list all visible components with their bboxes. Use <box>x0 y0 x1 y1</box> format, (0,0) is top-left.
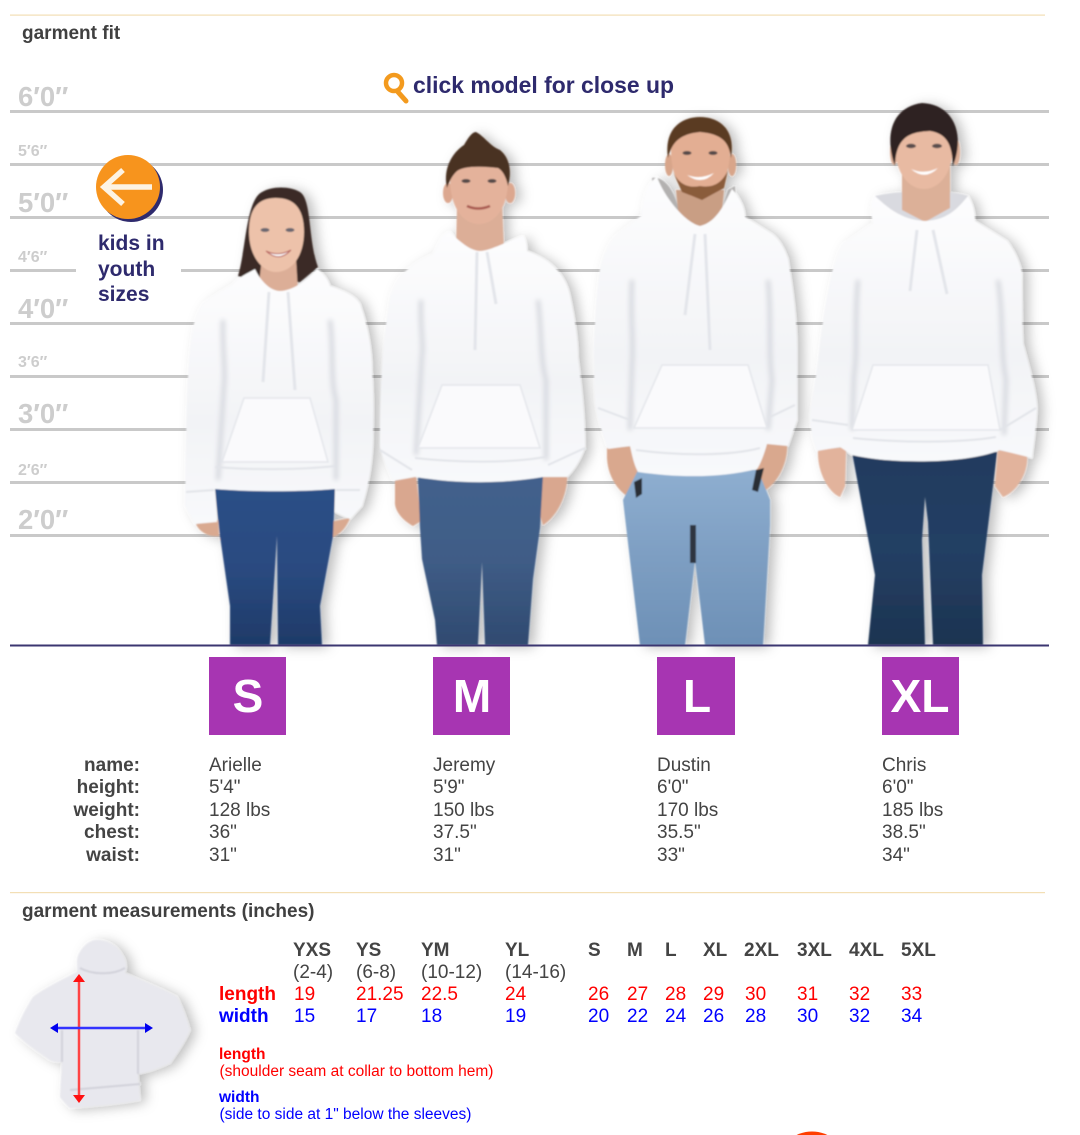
measurement table <box>218 940 936 1027</box>
chart baseline <box>10 644 1049 646</box>
stats: Dustin: 33" <box>657 845 685 866</box>
height scale labels: 3′0″ <box>18 398 68 429</box>
stats: Arielle: 5'4" <box>209 777 241 798</box>
section divider <box>10 892 1045 893</box>
table header: sizes: L <box>665 940 677 961</box>
stats: Chris: 185 lbs <box>882 800 943 821</box>
table header: sizes: 2XL <box>744 940 779 961</box>
model: Chris, size XL <box>810 103 1037 645</box>
heading: garment measurements: garment measurements (inches) <box>22 901 314 922</box>
table row: length: 24 <box>505 984 527 1005</box>
height scale labels: 4′0″ <box>18 293 68 324</box>
link: kids in youth sizes <box>98 232 165 306</box>
size badge: S <box>209 657 286 735</box>
table row: width: 28 <box>745 1006 766 1027</box>
stats: Jeremy: Jeremy <box>433 755 496 776</box>
table row: length: 19 <box>294 984 315 1005</box>
stats: Dustin: Dustin <box>657 755 711 776</box>
table row: length: 28 <box>665 984 686 1005</box>
table header: sizes: (10-12) <box>421 962 482 983</box>
height scale labels: 3′6″ <box>18 354 48 371</box>
stats: Arielle: 31" <box>209 845 237 866</box>
table header: sizes: 3XL <box>797 940 832 961</box>
size badge: L: L <box>683 670 711 722</box>
stats: Dustin: 35.5" <box>657 822 701 843</box>
model: Arielle, size S <box>185 188 373 645</box>
stats: Chris: 38.5" <box>882 822 926 843</box>
stats: Dustin: 6'0" <box>657 777 689 798</box>
icon: magnifying glass <box>386 75 406 101</box>
table row: length: 32 <box>849 984 870 1005</box>
table header: sizes: YM <box>421 940 450 961</box>
note: width definition: (side to side at 1" below the sleeves) <box>220 1106 471 1123</box>
size badge: L <box>657 657 735 735</box>
diagram: hoodie with measurement arrows <box>15 940 190 1108</box>
stats: Jeremy: 150 lbs <box>433 800 494 821</box>
model stat row labels <box>72 755 140 866</box>
model: Jeremy, size M <box>380 132 585 645</box>
height scale labels: 2′6″ <box>18 462 48 479</box>
model: Dustin, size L <box>594 117 797 645</box>
icon: orange back arrow button <box>96 155 163 222</box>
table row: width: width <box>218 1006 269 1027</box>
top divider <box>10 14 1045 16</box>
table header: sizes: 5XL <box>901 940 936 961</box>
table header: sizes: 4XL <box>849 940 884 961</box>
table row: length: 29 <box>703 984 724 1005</box>
height scale labels: 6′0″ <box>18 81 68 112</box>
size badge: M: M <box>453 670 491 722</box>
table row: width: 24 <box>665 1006 687 1027</box>
note: width definition <box>218 1089 471 1123</box>
heading: garment fit: garment fit <box>22 23 121 44</box>
stats: Dustin <box>657 755 718 866</box>
stats: Chris: 6'0" <box>882 777 914 798</box>
model stat row labels: weight: <box>72 800 140 821</box>
stats: Chris: 34" <box>882 845 910 866</box>
model stat row labels: name: <box>84 755 140 776</box>
table row: length: 21.25 <box>356 984 404 1005</box>
stats: Jeremy: 37.5" <box>433 822 477 843</box>
table row: width: 18 <box>421 1006 442 1027</box>
table row: width: 26 <box>703 1006 724 1027</box>
note: length definition: length <box>219 1046 266 1063</box>
height scale labels: 5′6″ <box>18 143 48 160</box>
table row: length: 30 <box>745 984 766 1005</box>
stats: Dustin: 170 lbs <box>657 800 718 821</box>
table header: sizes: YL <box>505 940 530 961</box>
height chart grid <box>10 110 1049 537</box>
height scale labels: 4′6″ <box>18 249 48 266</box>
link: kids in youth sizes: youth <box>98 258 155 281</box>
table header: sizes: (6-8) <box>356 962 396 983</box>
size badge: M <box>433 657 510 735</box>
stats: Arielle: 128 lbs <box>209 800 270 821</box>
model stat row labels: waist: <box>85 845 140 866</box>
cropped orange circle at bottom edge <box>780 1132 844 1135</box>
stats: Jeremy: 31" <box>433 845 461 866</box>
table header: sizes <box>293 940 936 983</box>
arrow: width <box>50 1023 153 1033</box>
table header: sizes: (2-4) <box>293 962 333 983</box>
stats: Chris <box>882 755 943 866</box>
instruction: click model for close up: click model for close up <box>413 72 674 98</box>
table header: sizes: (14-16) <box>505 962 566 983</box>
stats: Arielle: 36" <box>209 822 237 843</box>
table header: sizes: S <box>588 940 601 961</box>
stats: Jeremy: 5'9" <box>433 777 465 798</box>
table row: length: 27 <box>627 984 648 1005</box>
link: kids in youth sizes: kids in <box>98 232 165 255</box>
table row: length: 31 <box>797 984 818 1005</box>
table row: width: 34 <box>901 1006 923 1027</box>
table row: width: 17 <box>356 1006 377 1027</box>
height scale labels: 2′0″ <box>18 504 68 535</box>
stats: Arielle: Arielle <box>209 755 262 776</box>
stats: Jeremy <box>433 755 496 866</box>
height scale labels: 5′0″ <box>18 187 68 218</box>
note: length definition <box>219 1046 493 1080</box>
table row: length: 26 <box>588 984 609 1005</box>
size badge: XL: XL <box>890 670 950 722</box>
height scale labels <box>18 81 68 535</box>
table row: width: 20 <box>588 1006 609 1027</box>
table row: length: 22.5 <box>421 984 458 1005</box>
stats: Chris: Chris <box>882 755 926 776</box>
size badge: XL <box>882 657 959 735</box>
table row: width: 32 <box>849 1006 870 1027</box>
note: length definition: (shoulder seam at collar to bottom hem) <box>220 1063 493 1080</box>
link: kids in youth sizes: sizes <box>98 283 149 306</box>
table header: sizes: M <box>627 940 643 961</box>
note: width definition: width <box>218 1089 259 1106</box>
table header: sizes: XL <box>703 940 728 961</box>
table row: width: 15 <box>294 1006 315 1027</box>
table row: length: 33 <box>901 984 922 1005</box>
table header: sizes: YS <box>356 940 381 961</box>
model stat row labels: chest: <box>84 822 140 843</box>
arrow: length <box>73 974 85 1103</box>
table row: width: 19 <box>505 1006 526 1027</box>
table row: width: 22 <box>627 1006 648 1027</box>
table header: sizes: YXS <box>293 940 331 961</box>
table row: length <box>219 984 922 1005</box>
table row: width <box>218 1006 923 1027</box>
size badge: S: S <box>233 670 263 722</box>
table row: length: length <box>219 984 276 1005</box>
table row: width: 30 <box>797 1006 818 1027</box>
stats: Arielle <box>209 755 270 866</box>
model stat row labels: height: <box>77 777 140 798</box>
